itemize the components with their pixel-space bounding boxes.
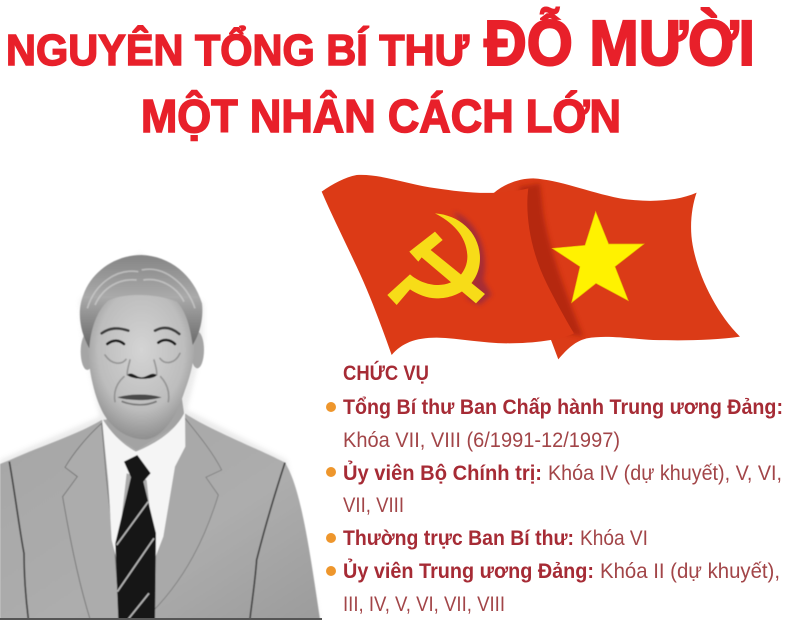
title [6,6,755,142]
flag: right panel [493,178,740,359]
item 2 bold: Ủy viên Bộ Chính trị: [343,461,542,485]
portrait: suit creases [9,462,285,619]
flag: left panel [322,175,574,355]
portrait: tie stripes [117,502,154,619]
item 2 detail continued: VII, VIII [343,494,404,517]
portrait: shirt collar [102,412,185,560]
item 4 bold: Ủy viên Trung ương Đảng: [343,559,594,583]
title line 2: subtitle: MỘT NHÂN CÁCH LỚN [141,90,621,142]
item 1 bold: Tổng Bí thư Ban Chấp hành Trung ương Đảng: [343,396,783,419]
portrait: face [88,290,195,439]
portrait: right lapel [145,418,222,619]
portrait: eyebrows [102,328,179,334]
text block: positions [326,361,783,616]
portrait: hair strands [87,269,195,308]
flag: emblem shadow [453,212,492,305]
bullet 1 [326,402,336,412]
icon: star [552,212,644,303]
title line 1: name: ĐỖ MƯỜI [484,6,755,79]
portrait: left lapel [63,423,120,619]
bullet 3 [326,533,336,543]
portrait: soft halo [0,253,320,620]
item 3 detail: Khóa VI [580,527,648,550]
portrait: mouth [117,395,162,400]
heading: positions: CHỨC VỤ [343,361,429,385]
flag: fold shadow [519,183,583,337]
photo bottom edge [0,618,322,620]
portrait: suit [0,413,320,619]
title line 1: position: NGUYÊN TỔNG BÍ THƯ [6,24,469,75]
bullet 2 [326,467,336,477]
flag [322,175,740,359]
item 3 bold: Thường trực Ban Bí thư: [343,527,574,550]
item 2 detail: Khóa IV (dự khuyết), V, VI, [548,462,782,485]
portrait: face shading [105,353,180,402]
portrait [0,253,320,620]
portrait: eyes [107,340,175,344]
portrait: neck [107,397,185,450]
item 4 detail: Khóa II (dự khuyết), [600,560,780,583]
portrait: hair [80,255,202,348]
icon: hammer and sickle [387,213,485,305]
item 1 detail: Khóa VII, VIII (6/1991-12/1997) [343,429,620,452]
item 4 detail continued: III, IV, V, VI, VII, VIII [343,593,505,616]
portrait: lower lip [122,401,157,405]
portrait: ears [81,332,204,370]
portrait: nose [127,374,157,379]
bullet 4 [326,566,336,576]
portrait: tie [115,455,156,619]
